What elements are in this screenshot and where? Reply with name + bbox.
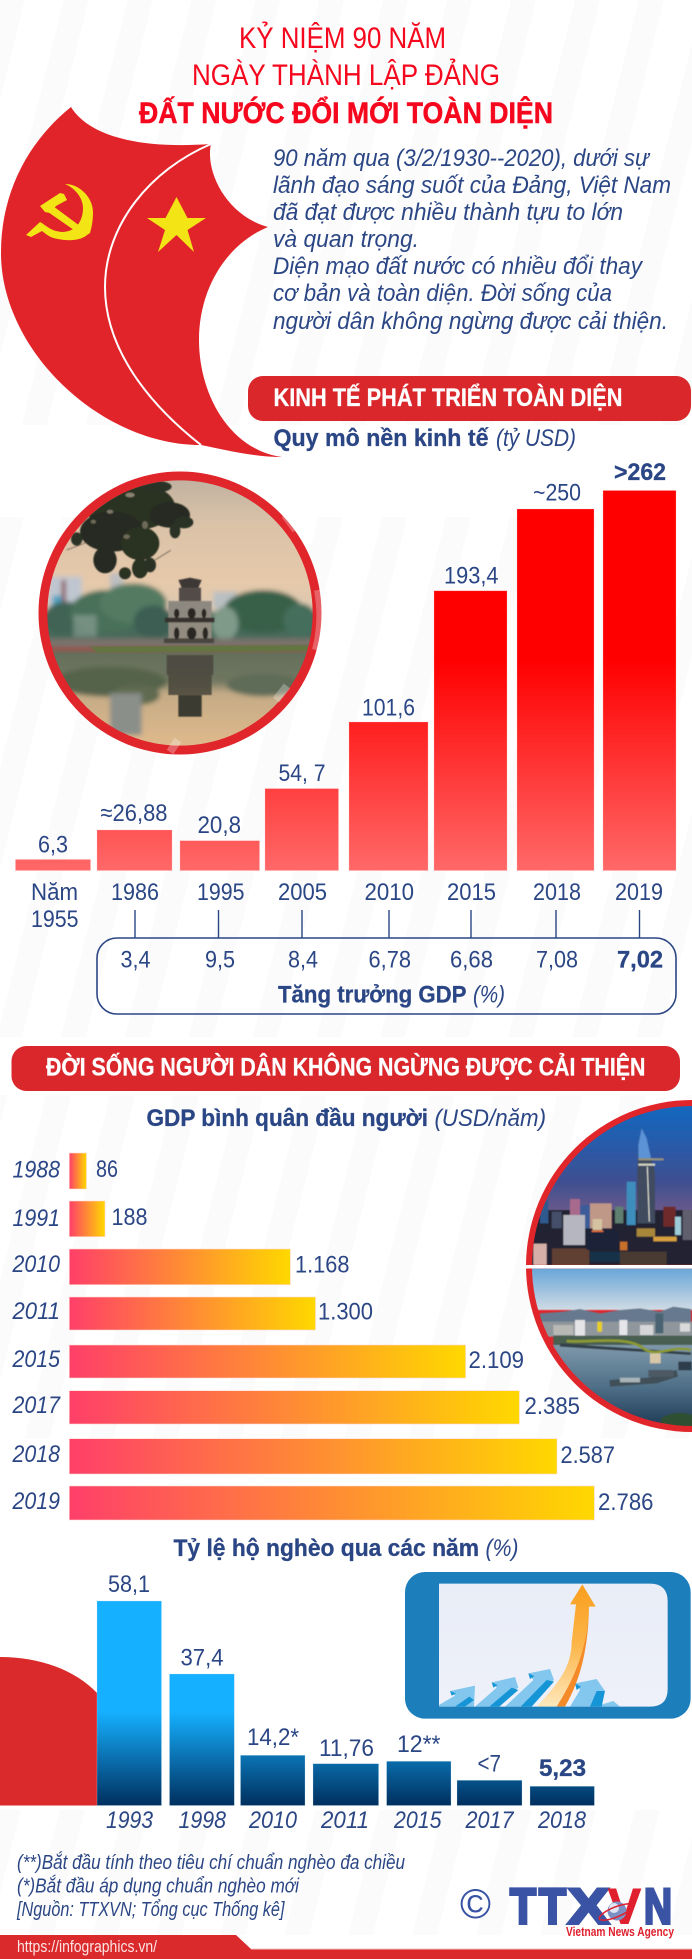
logo: TTXVN: X [568, 1878, 609, 1934]
year labels: 2018 [12, 1441, 60, 1468]
panel: GDP growth box: Tăng trưởng GDP [278, 982, 466, 1008]
bar values: 20,8 [198, 812, 241, 839]
year labels: 2015 [447, 879, 496, 906]
title: NGÀY THÀNH LẬP ĐẢNG [192, 58, 500, 92]
icon: copyright: © [460, 1880, 491, 1927]
intro paragraph [273, 145, 671, 335]
footnotes [16, 1851, 405, 1921]
year labels: 1988 [12, 1156, 60, 1184]
bar values: 6,3 [38, 832, 68, 858]
bar values: 1.168 [295, 1252, 350, 1278]
bar chart: poverty rate [97, 1571, 594, 1834]
year labels: 1955 [31, 906, 78, 933]
logo: TTXVN: T [510, 1878, 536, 1934]
bar values: 193,4 [444, 562, 498, 590]
year labels: 2019 [12, 1488, 60, 1515]
footnotes: [Nguồn: TTXVN; Tổng cục Thống kê] [16, 1898, 286, 1921]
title: ĐẤT NƯỚC ĐỔI MỚI TOÀN DIỆN [139, 96, 553, 130]
icon: hammer and sickle [26, 184, 93, 240]
bars [69, 1153, 594, 1520]
year labels: 1986 [111, 879, 159, 906]
bar values: ~250 [533, 480, 581, 506]
bars [16, 490, 676, 870]
bar values: 37,4 [180, 1644, 224, 1672]
intro paragraph: người dân không ngừng được cải thiện. [273, 308, 668, 335]
intro paragraph: và quan trọng. [273, 226, 419, 253]
year labels: 2011 [320, 1807, 369, 1834]
bar values: 2.109 [468, 1347, 524, 1374]
panel: GDP growth box: 7,08 [536, 946, 578, 974]
photo: city skylines [520, 1100, 692, 1432]
year labels: 2015 [12, 1346, 60, 1373]
photo: Hanoi turtle tower [38, 472, 322, 754]
bar values: 54, 7 [278, 760, 326, 787]
year labels: 2017 [12, 1392, 61, 1419]
bar values: <7 [478, 1750, 501, 1778]
year labels [12, 1156, 61, 1515]
footnotes: (**)Bắt đầu tính theo tiêu chí chuẩn nghèo đa chiều [17, 1851, 405, 1874]
icon: yellow star [147, 197, 206, 252]
intro paragraph: Diện mạo đất nước có nhiều đổi thay [273, 253, 644, 280]
year labels: 2019 [615, 879, 663, 906]
icon: globe [597, 1901, 635, 1923]
bar values: >262 [614, 459, 666, 486]
year labels: 2017 [465, 1807, 515, 1834]
panel: GDP growth box: (%) [473, 982, 505, 1008]
year labels: 2010 [12, 1251, 60, 1278]
heading: poverty rate: Tỷ lệ hộ nghèo qua các năm [174, 1535, 479, 1562]
bar values: 12** [397, 1731, 441, 1758]
bar values: 1.300 [318, 1298, 373, 1326]
intro paragraph: đã đạt được nhiều thành tựu to lớn [273, 199, 623, 226]
bar values: 11,76 [319, 1735, 374, 1762]
bar values [96, 1156, 654, 1516]
panel: GDP growth box: 6,78 [368, 946, 411, 974]
panel: GDP growth box: 3,4 [120, 946, 150, 974]
bar values: 5,23 [539, 1755, 586, 1782]
bar values [38, 459, 666, 858]
year labels [106, 1807, 586, 1834]
bar values: 188 [112, 1204, 148, 1231]
year labels [31, 879, 663, 933]
year labels: 2015 [393, 1807, 442, 1834]
panel: economy banner: KINH TẾ PHÁT TRIỂN TOÀN DIỆN [274, 382, 622, 412]
year labels: 2005 [278, 879, 327, 906]
bar values: ≈26,88 [100, 800, 168, 827]
year labels: 1995 [197, 879, 244, 906]
bar values: 86 [96, 1156, 118, 1183]
year labels: 1991 [12, 1205, 60, 1232]
bar values: 2.587 [560, 1442, 615, 1469]
title: KỶ NIỆM 90 NĂM [239, 21, 446, 55]
year labels: 2018 [537, 1807, 586, 1834]
panel: GDP growth box: 7,02 [617, 946, 663, 974]
title [139, 21, 553, 130]
bar values: 58,1 [108, 1571, 150, 1598]
year labels: 1993 [106, 1807, 153, 1834]
panel: GDP growth box: 6,68 [450, 946, 493, 974]
heading: economy size: Quy mô nền kinh tế [274, 425, 489, 452]
panel: GDP growth box: 8,4 [288, 946, 318, 974]
year labels: Năm [31, 879, 78, 906]
footer bar with URL [0, 1935, 692, 1959]
year labels: 2010 [364, 879, 414, 906]
logo: TTXVN: T [539, 1878, 566, 1934]
logo: TTXVN: N [644, 1878, 672, 1934]
bar chart: economy size [16, 459, 676, 933]
panel: economy banner [248, 376, 691, 421]
intro paragraph: 90 năm qua (3/2/1930--2020), dưới sự [273, 145, 650, 172]
year labels: 2011 [12, 1298, 60, 1325]
bar values: 2.786 [598, 1489, 654, 1516]
year labels: 2010 [248, 1807, 297, 1834]
footnotes: (*)Bắt đầu áp dụng chuẩn nghèo mới [17, 1874, 300, 1898]
bar values: 2.385 [524, 1393, 580, 1420]
icon: rising arrows picture [405, 1572, 691, 1719]
heading: economy size: (tỷ USD) [496, 425, 576, 452]
heading: poverty rate: (%) [486, 1535, 518, 1562]
bars [97, 1601, 594, 1806]
decorative red half circle [0, 1657, 97, 1806]
heading: GDP per capita: GDP bình quân đầu người [146, 1105, 428, 1132]
bar values [108, 1571, 586, 1782]
intro paragraph: cơ bản và toàn diện. Đời sống của [273, 280, 612, 307]
bar values: 101,6 [362, 694, 415, 722]
footer bar with URL: https://infographics.vn/ [17, 1938, 157, 1956]
year labels: 2018 [533, 879, 581, 906]
heading: GDP per capita: (USD/năm) [434, 1105, 546, 1132]
panel: living standards banner [12, 1046, 680, 1091]
logo: TTXVN: V [608, 1878, 642, 1934]
panel: GDP growth box [97, 910, 676, 1014]
panel: GDP growth box: 9,5 [205, 946, 235, 974]
icon: party flag [1, 107, 282, 457]
bar chart: GDP per capita [12, 1153, 654, 1520]
logo: TTXVN [510, 1878, 675, 1939]
year labels: 1998 [178, 1807, 226, 1834]
bar values: 14,2* [247, 1724, 299, 1751]
